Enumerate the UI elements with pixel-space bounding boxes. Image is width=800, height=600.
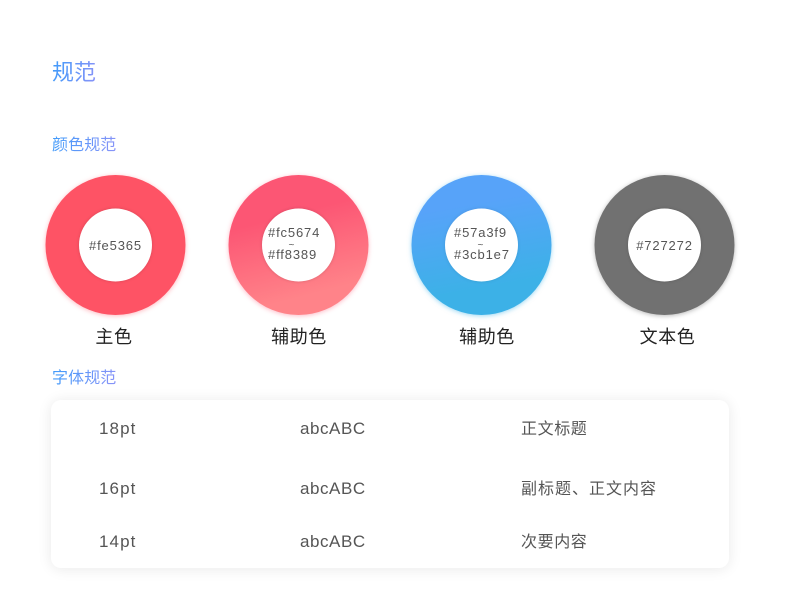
hex value: #fe5365 [89,238,142,253]
row 14pt size: 14pt [99,532,136,551]
hex range [454,224,510,262]
donut graphic [408,173,554,319]
hex range: ~ [288,240,295,251]
label: primary: 主色 [95,327,133,347]
row 16pt usage: 副标题、正文内容 [521,481,657,498]
hex range: ~ [478,240,484,251]
row 16pt sample: abcABC [300,479,366,498]
donut graphic [43,174,188,318]
hex value: #727272 [636,238,693,253]
hex range: #3cb1e7 [454,246,510,262]
row 16pt size: 16pt [99,479,136,498]
row 14pt sample: abcABC [300,532,366,551]
title: 规范 [52,60,96,85]
heading: colour spec: 颜色规范 [52,137,116,154]
hex range: #fc5674 [268,224,320,240]
swatch: secondary blue gradient [408,173,554,319]
swatch: primary colour [43,174,188,318]
row 14pt usage: 次要内容 [521,534,587,551]
label: secondary red: 辅助色 [271,327,327,347]
row 18pt sample: abcABC [300,419,366,438]
label: secondary blue: 辅助色 [459,327,515,347]
donut graphic [592,174,737,318]
hex range: #57a3f9 [454,224,507,240]
hex range [268,224,320,262]
swatch: secondary red gradient [226,174,371,318]
label: text colour: 文本色 [640,327,695,347]
hex range: #ff8389 [268,246,317,262]
row 18pt usage: 正文标题 [521,421,587,438]
heading: font spec: 字体规范 [52,370,116,387]
row 18pt size: 18pt [99,419,136,438]
swatch: text colour [592,174,737,318]
donut graphic [226,174,371,318]
panel: font table [51,400,729,568]
